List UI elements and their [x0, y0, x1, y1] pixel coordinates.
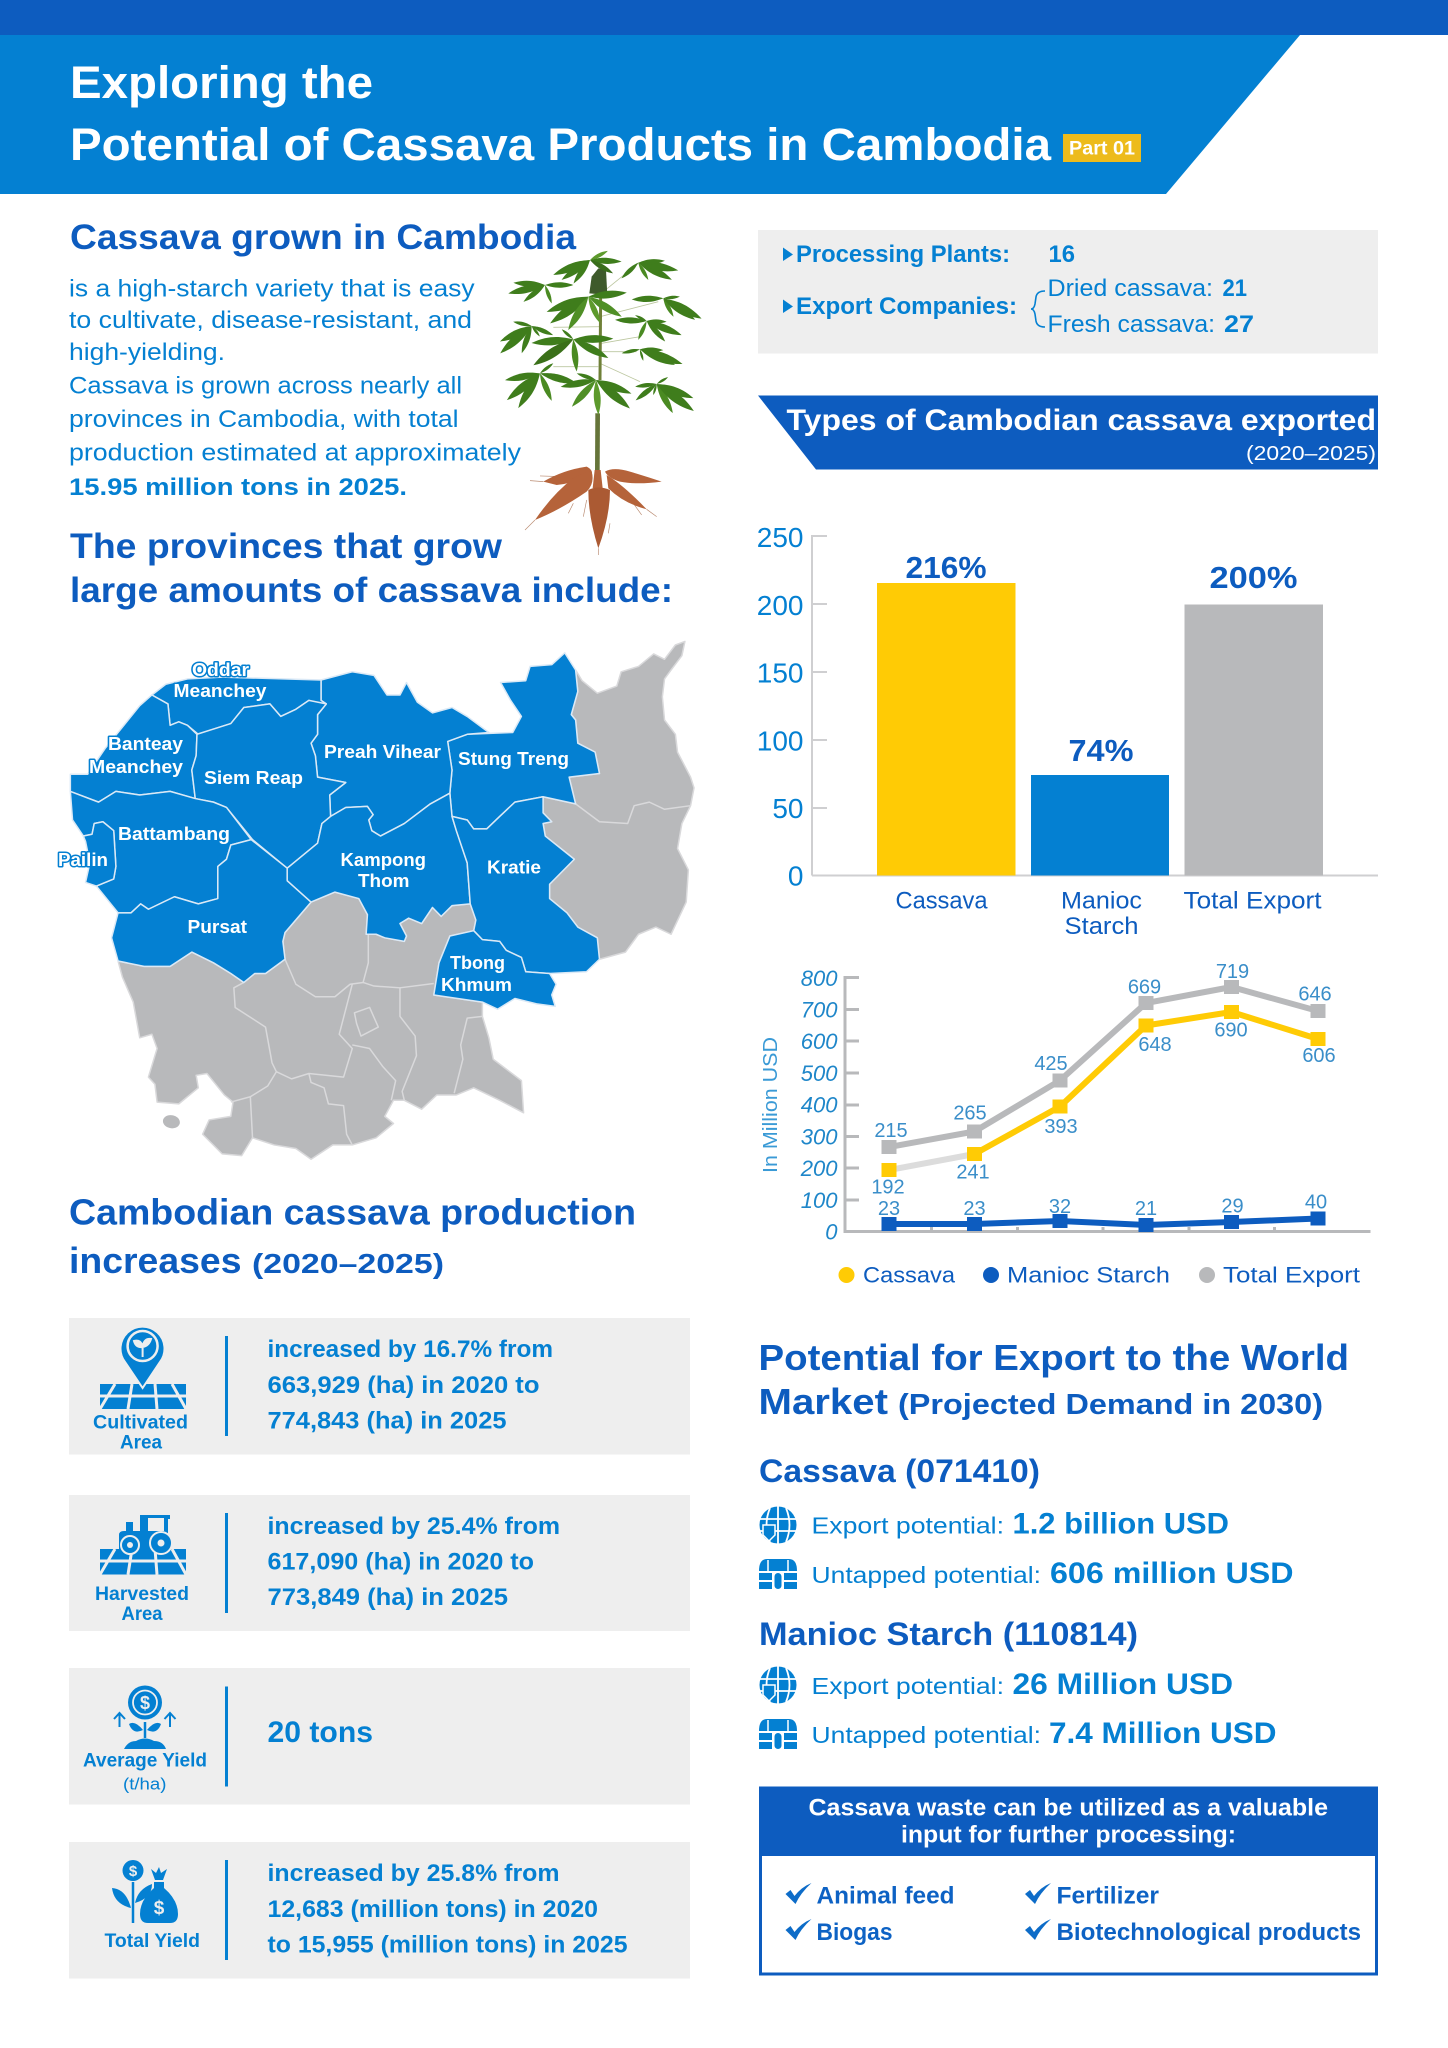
map labels: Kratie	[487, 858, 541, 878]
bar: cassava: 216%	[906, 550, 986, 585]
y axis labels: 50	[772, 793, 804, 824]
label: total yield: Total Yield	[104, 1931, 200, 1952]
map labels: Khmum	[441, 975, 512, 995]
bar: manioc starch	[1031, 733, 1169, 940]
bar: manioc starch: Manioc	[1061, 888, 1142, 914]
series: total export: 669	[1128, 976, 1161, 998]
y axis labels: 250	[757, 522, 804, 553]
bar: cassava	[877, 550, 1016, 914]
map labels: Pursat	[188, 917, 247, 937]
series: cassava	[871, 1005, 1336, 1198]
label: average yield: (t/ha)	[123, 1774, 166, 1794]
map labels: Siem Reap	[204, 768, 303, 788]
heading: production increases: (2020–2025)	[252, 1248, 444, 1279]
map: Pailin	[83, 822, 116, 886]
map labels: Preah Vihear	[324, 742, 441, 762]
panel: cultivated area	[69, 1318, 690, 1454]
waste heading	[808, 1794, 1328, 1848]
map: Tbong Khmum	[434, 931, 556, 1009]
label: harvested area	[95, 1584, 189, 1625]
section: manioc starch potential: 7.4 Million USD	[1049, 1717, 1276, 1750]
label: cultivated area: Cultivated	[93, 1412, 188, 1434]
waste item: animal feed: Animal feed	[816, 1882, 954, 1910]
section: manioc starch potential: Export potential:	[812, 1673, 1004, 1699]
title: Exploring the	[70, 57, 373, 108]
icon: globe	[760, 1506, 796, 1544]
intro text block: 15.95 million tons in 2025.	[69, 474, 407, 501]
panel: total yield	[69, 1842, 690, 1978]
text: cultivated area figures: increased by 16.7% from	[268, 1336, 553, 1363]
panel: average yield	[69, 1668, 690, 1804]
part badge: Part 01	[1069, 138, 1135, 160]
legend: Total Export	[1223, 1262, 1360, 1288]
banner: types exported: (2020–2025)	[1246, 443, 1376, 465]
icon: treasure chest	[759, 1559, 797, 1589]
section: cassava potential: 1.2 billion USD	[1012, 1508, 1229, 1540]
y axis labels: 700	[801, 998, 838, 1022]
section: manioc starch potential: Manioc Starch (110814)	[759, 1616, 1138, 1652]
map labels: Tbong	[450, 953, 505, 973]
series: cassava: 241	[956, 1162, 990, 1184]
legend	[838, 1262, 1360, 1288]
panel: processing plants and export companies: 21	[1222, 275, 1247, 302]
text: cultivated area figures: 774,843 (ha) in 2025	[268, 1408, 506, 1434]
waste item: fertilizer: Fertilizer	[1056, 1882, 1159, 1910]
icon: money plant and bag: $	[129, 1863, 138, 1880]
header banner	[0, 0, 1448, 194]
series: manioc starch: 23	[878, 1198, 900, 1220]
series: cassava: 606	[1302, 1045, 1336, 1067]
intro text block	[69, 218, 577, 501]
section: cassava potential: Cassava (071410)	[759, 1453, 1040, 1489]
y axis labels: 400	[801, 1092, 838, 1118]
map labels: Banteay	[108, 734, 183, 754]
map: Preah Vihear	[311, 672, 489, 836]
bar: manioc starch: 74%	[1068, 733, 1134, 768]
series: total export: 719	[1216, 961, 1249, 983]
panel: processing plants and export companies: 27	[1224, 311, 1254, 338]
map: Banteay Meanchey	[70, 695, 197, 802]
heading: provinces: The provinces that grow	[70, 527, 503, 566]
y axis labels	[757, 522, 804, 892]
map of Cambodia	[58, 641, 694, 1159]
heading: export potential	[758, 1337, 1349, 1422]
section: cassava potential: Export potential:	[812, 1512, 1004, 1538]
intro text block: provinces in Cambodia, with total	[69, 406, 459, 433]
map labels: Meanchey	[89, 757, 183, 777]
panel: processing plants and export companies: Dried cassava:	[1048, 275, 1213, 302]
map labels: Meanchey	[174, 681, 266, 701]
heading: production increases: Cambodian cassava production	[69, 1192, 636, 1232]
heading: export potential: Market	[758, 1381, 888, 1422]
text: harvested area figures: increased by 25.4% from	[268, 1513, 560, 1540]
heading: production increases: increases	[69, 1240, 242, 1281]
y axis labels: 100	[801, 1188, 838, 1213]
map: Kratie	[452, 797, 599, 974]
panel: harvested area	[69, 1495, 690, 1631]
series: manioc starch	[878, 1192, 1327, 1232]
bar: manioc starch: Starch	[1064, 913, 1138, 940]
map: grey eastern provinces	[543, 641, 694, 959]
bar: cassava: Cassava	[896, 888, 988, 914]
series: total export	[874, 961, 1332, 1154]
waste item: biogas: Biogas	[816, 1919, 892, 1946]
section: cassava potential: Untapped potential:	[812, 1562, 1041, 1588]
section: manioc starch potential: Untapped potential:	[812, 1722, 1041, 1748]
map labels: Battambang	[118, 824, 230, 844]
section: manioc starch potential	[759, 1616, 1276, 1750]
text: harvested area figures: 617,090 (ha) in 2020 to	[268, 1548, 534, 1576]
text: harvested area figures: 773,849 (ha) in 2025	[268, 1584, 508, 1611]
heading: export potential: (Projected Demand in 2030)	[898, 1389, 1323, 1421]
label: harvested area: Harvested	[95, 1584, 189, 1605]
series: cassava: 690	[1214, 1020, 1248, 1042]
intro text block: Cassava grown in Cambodia	[70, 218, 577, 257]
bar chart	[757, 522, 1378, 940]
y axis labels: 800	[801, 966, 838, 991]
text: cultivated area figures: 663,929 (ha) in 2020 to	[268, 1372, 540, 1399]
icon: money plant and bag: $	[154, 1898, 165, 1919]
map labels: Oddar	[192, 660, 249, 680]
bar: total export	[1184, 560, 1323, 914]
panel: processing plants and export companies: Processing Plants:	[796, 241, 1010, 268]
map labels: Thom	[358, 871, 410, 891]
map: Pursat	[112, 840, 311, 982]
panel: processing plants and export companies: Fresh cassava:	[1048, 311, 1215, 338]
icon: money plant and bag	[112, 1860, 178, 1923]
title	[70, 57, 1052, 170]
map: grey southern provinces	[118, 892, 524, 1159]
text: total yield figures: 12,683 (million tons) in 2020	[268, 1896, 598, 1923]
text: harvested area figures	[268, 1513, 560, 1611]
map labels: Pailin	[58, 850, 108, 870]
icon: treasure chest	[759, 1719, 797, 1749]
waste item: biogas	[786, 1919, 892, 1946]
title: Potential of Cassava Products in Cambodia	[70, 119, 1052, 170]
panel: cassava waste	[759, 1786, 1378, 1974]
map: Oddar Meanchey	[152, 677, 326, 734]
series: total export: 425	[1034, 1053, 1068, 1075]
y axis labels: 100	[757, 726, 804, 756]
bar: total export: 200%	[1210, 560, 1298, 595]
y axis labels: 200	[800, 1156, 838, 1181]
map labels: Kampong	[340, 850, 426, 870]
intro text block: Cassava is grown across nearly all	[69, 372, 462, 400]
text: total yield figures	[268, 1860, 628, 1958]
y axis labels: 0	[825, 1220, 838, 1244]
y axis labels	[800, 966, 838, 1244]
heading: export potential: Potential for Export to the World	[758, 1337, 1349, 1378]
map labels: Stung Treng	[458, 749, 569, 769]
intro text block: is a high-starch variety that is easy	[69, 276, 475, 302]
y axis labels: 0	[788, 860, 804, 892]
map: Battambang	[70, 791, 251, 913]
label: average yield	[83, 1750, 207, 1794]
text: average yield value: 20 tons	[268, 1716, 373, 1749]
icon: globe	[760, 1666, 796, 1704]
heading: provinces	[70, 527, 673, 610]
series: cassava: 648	[1138, 1034, 1172, 1056]
panel: processing plants and export companies: 16	[1048, 241, 1075, 268]
text: cultivated area figures	[268, 1336, 553, 1434]
y axis labels: 300	[801, 1124, 838, 1150]
intro text block: high-yielding.	[69, 339, 225, 366]
intro text block: production estimated at approximately	[69, 440, 521, 466]
label: harvested area: Area	[122, 1604, 163, 1625]
banner: types exported	[758, 396, 1378, 470]
intro text block: to cultivate, disease-resistant, and	[69, 307, 472, 334]
section: manioc starch potential: 26 Million USD	[1012, 1668, 1233, 1701]
series: cassava: 393	[1044, 1116, 1078, 1138]
legend: Cassava	[863, 1262, 956, 1288]
label: average yield: Average Yield	[83, 1750, 207, 1772]
series: total export: 265	[953, 1102, 987, 1124]
banner: types exported: Types of Cambodian cassava exported	[786, 404, 1376, 437]
part badge	[1063, 134, 1141, 162]
series: manioc starch: 32	[1049, 1196, 1071, 1218]
panel: processing plants and export companies: Export Companies:	[796, 293, 1017, 320]
line chart	[760, 961, 1370, 1288]
series: manioc starch: 40	[1305, 1192, 1327, 1214]
text: total yield figures: to 15,955 (million tons) in 2025	[268, 1932, 628, 1958]
icon: cassava plant	[498, 249, 704, 555]
series: manioc starch: 23	[963, 1198, 986, 1220]
waste heading: input for further processing:	[901, 1822, 1236, 1848]
section: cassava potential	[759, 1453, 1294, 1590]
heading: provinces: large amounts of cassava include:	[70, 571, 673, 610]
text: total yield figures: increased by 25.8% from	[268, 1860, 560, 1887]
icon: map pin on field	[100, 1327, 186, 1409]
series: manioc starch: 21	[1135, 1198, 1157, 1220]
map: Stung Treng	[448, 653, 599, 829]
map labels	[58, 660, 569, 995]
series: manioc starch: 29	[1221, 1196, 1244, 1218]
map: Kampong Thom	[287, 793, 470, 941]
series: cassava: 192	[871, 1176, 905, 1198]
y axis labels: 200	[757, 590, 804, 621]
label: cultivated area	[93, 1412, 188, 1454]
panel: processing plants and export companies	[758, 230, 1378, 354]
icon: coin plant: $	[140, 1693, 150, 1713]
map: Siem Reap	[192, 700, 346, 868]
label: cultivated area: Area	[120, 1432, 162, 1454]
waste heading: Cassava waste can be utilized as a valuable	[808, 1794, 1328, 1822]
waste item: biotechnological products: Biotechnological products	[1056, 1919, 1361, 1946]
section: cassava potential: 606 million USD	[1050, 1557, 1294, 1590]
series: total export: 646	[1298, 984, 1332, 1006]
series: total export: 215	[874, 1120, 908, 1142]
y axis labels: 600	[801, 1029, 838, 1054]
axis title: In Million USD	[760, 1037, 782, 1173]
icon: coin plant	[114, 1686, 176, 1749]
legend: Manioc Starch	[1007, 1262, 1170, 1288]
y axis labels: 150	[757, 658, 804, 688]
heading: production increases	[69, 1192, 636, 1281]
icon: tractor on field	[100, 1515, 186, 1574]
y axis labels: 500	[801, 1061, 838, 1086]
bar: total export: Total Export	[1184, 888, 1322, 914]
